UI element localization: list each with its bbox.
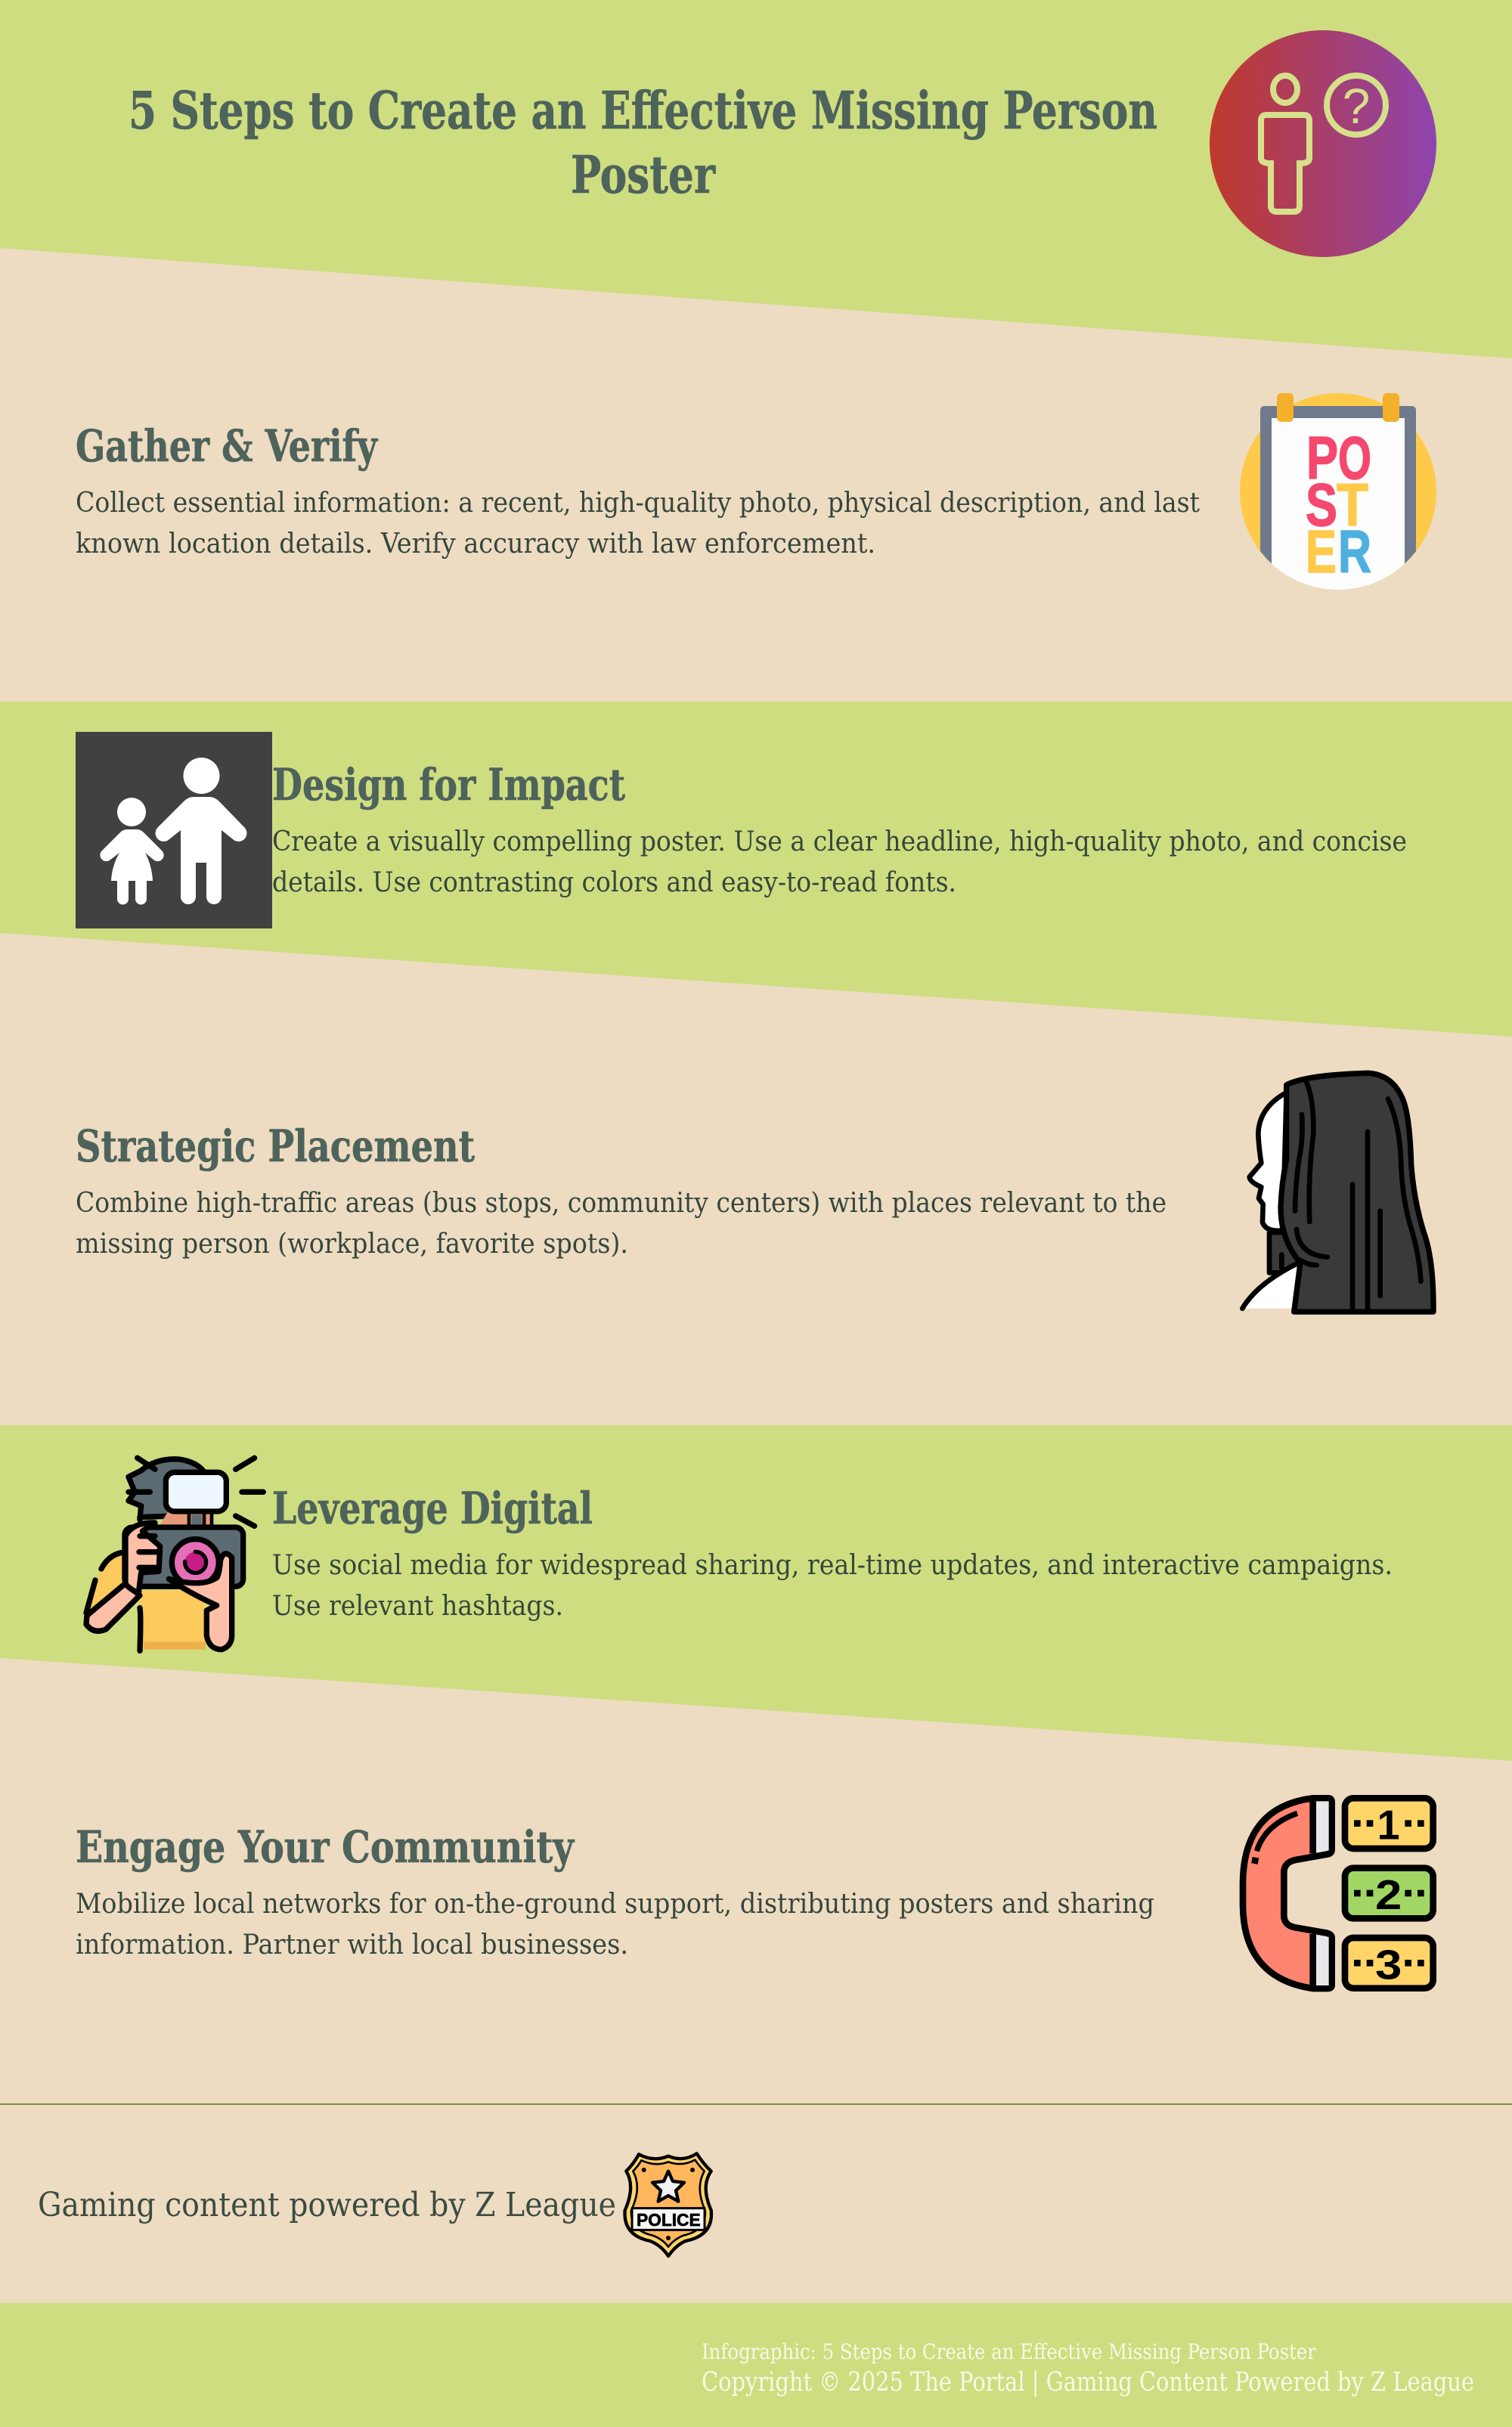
panel: step 1 gather and verify [76,393,1436,590]
title [129,81,1157,206]
icon: telephone with numbered menu [1243,1798,1433,1988]
text block: step 3 description: Combine high-traffic areas (bus stops, community centers) with places relevant to the [76,1188,1167,1219]
divider line [0,2103,1512,2105]
icon: telephone with numbered menu: 3 [1375,1941,1402,1988]
text block: step 4 description: Use relevant hashtags. [272,1591,563,1622]
icon: woman with long hair in profile [1242,1073,1433,1312]
text block: step 5 description [76,1889,1154,1961]
icon: poster: O [1338,424,1371,491]
icon: police badge [624,2153,711,2256]
icon: missing person with question mark: ? [1343,78,1370,134]
panel: sponsor strip [38,2153,711,2256]
icon: poster [1240,393,1436,590]
panel: step 5 engage your community [76,1798,1433,1988]
heading: leverage digital: Leverage Digital [272,1483,593,1534]
icon: photographer with camera [86,1458,263,1651]
text block: step 1 description: known location details. Verify accuracy with law enforcement. [76,528,875,559]
icon: adult and child [76,732,272,928]
heading: gather and verify: Gather & Verify [76,420,378,472]
panel: footer [0,2303,1512,2427]
icon: missing person with question mark [1210,30,1436,257]
panel: step 4 leverage digital [0,1425,1512,1761]
panel: header [0,0,1512,358]
title: 5 Steps to Create an Effective Missing Person [129,81,1157,141]
title: Poster [571,145,716,206]
heading: design for impact: Design for Impact [272,759,625,811]
text block: step 1 description [76,488,1200,559]
icon: poster: R [1338,518,1371,585]
text block: step 5 description: Mobilize local networks for on-the-ground support, distributing posters and sharing [76,1889,1154,1920]
icon: poster: E [1306,518,1337,585]
text block: step 1 description: Collect essential information: a recent, high-quality photo, physical description, and last [76,488,1200,519]
text block: step 4 description: Use social media for widespread sharing, real-time updates, and interactive campaigns. [272,1550,1393,1581]
text block: footer caption: Infographic: 5 Steps to Create an Effective Missing Person Poster [702,2339,1317,2364]
panel: step 3 strategic placement [76,1073,1433,1312]
text block: step 3 description [76,1188,1167,1260]
icon: poster: P [1306,424,1338,491]
heading: engage your community: Engage Your Community [76,1821,575,1873]
text block: step 2 description: Create a visually compelling poster. Use a clear headline, high-quality photo, and concise [272,826,1407,857]
icon: police badge: POLICE [637,2210,701,2230]
text block: step 3 description: missing person (workplace, favorite spots). [76,1229,628,1260]
heading: strategic placement: Strategic Placement [76,1121,475,1172]
text block: step 5 description: information. Partner with local businesses. [76,1930,628,1961]
icon: telephone with numbered menu: 2 [1375,1871,1402,1918]
text block: step 2 description: details. Use contrasting colors and easy-to-read fonts. [272,867,956,898]
text block: step 2 description [272,826,1407,898]
icon: poster: S [1306,471,1337,538]
panel: step 2 design for impact [0,702,1512,1037]
text block: step 4 description [272,1550,1393,1622]
icon: poster: T [1337,471,1368,538]
icon: telephone with numbered menu: 1 [1377,1802,1400,1849]
text block: sponsor line: Gaming content powered by Z League [38,2186,616,2224]
